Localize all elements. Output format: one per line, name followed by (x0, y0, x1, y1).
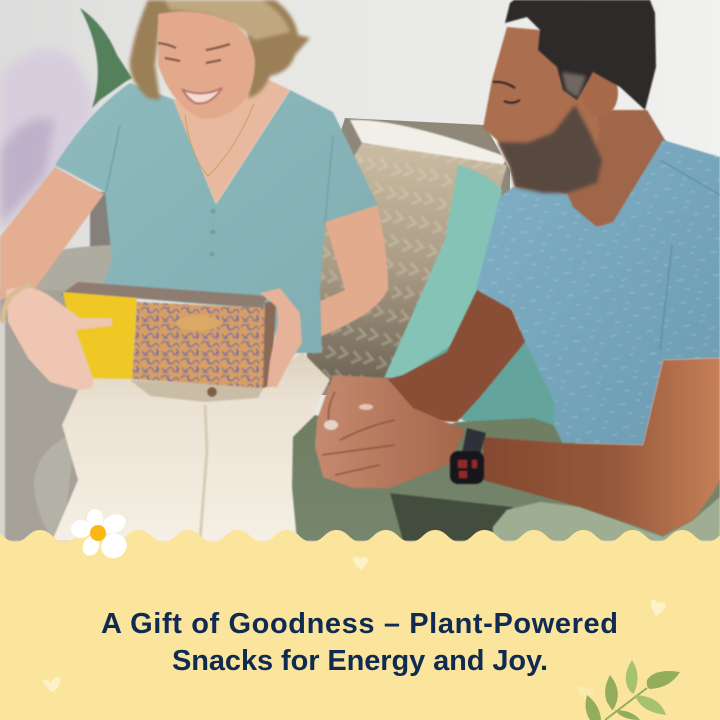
plant: pampas grass (0, 48, 92, 235)
woman: face (158, 12, 255, 119)
woman (0, 0, 388, 541)
headline: Snacks for Energy and Joy. (172, 645, 548, 677)
man: hair (505, 0, 656, 110)
icon: heart faint (578, 686, 594, 699)
icon: daisy flower (71, 509, 131, 563)
headline: A Gift of Goodness – Plant-Powered (101, 608, 618, 640)
man: hands (315, 375, 465, 488)
man: shirt (476, 140, 720, 445)
man: eye and brow (493, 82, 520, 103)
woman: hands (3, 284, 302, 390)
man: grey sideburn (562, 72, 586, 98)
woman: smile (183, 88, 222, 103)
man: upper arm (385, 290, 525, 422)
man: smartwatch (450, 428, 486, 484)
man: ear (582, 69, 618, 117)
box: end flap (263, 300, 276, 388)
man: head (483, 0, 656, 193)
man: trousers (292, 415, 720, 541)
woman: shirt (55, 83, 378, 353)
pillow: teal (384, 165, 575, 445)
gift box (60, 282, 276, 388)
bracelet (3, 284, 32, 323)
woman: trousers (52, 352, 330, 541)
wall background (0, 0, 720, 545)
woman: right arm (296, 200, 388, 344)
icon: heart top centre (353, 556, 368, 570)
plant: green fern leaf (80, 8, 132, 108)
hand: left (6, 287, 112, 390)
woman: neck and chest (173, 78, 290, 204)
man: forearm lower (483, 358, 720, 535)
woman: eyes and brows (158, 43, 230, 63)
woman: left arm (0, 167, 104, 300)
pillow: white (350, 120, 507, 172)
man: neck (560, 110, 668, 228)
woman: necklace (185, 104, 254, 176)
sofa: back right (310, 118, 510, 395)
woman: hair (130, 0, 310, 100)
hand: right (260, 288, 302, 387)
pillow: patterned beige (305, 143, 507, 385)
box: yellow sleeve (63, 292, 137, 379)
icon: green leaf sprig (586, 660, 680, 720)
man (292, 0, 720, 541)
man: beard (498, 105, 602, 193)
icon: heart right (651, 599, 666, 616)
banner: scalloped yellow panel (0, 530, 720, 720)
fingernails (324, 420, 338, 430)
photo: couple opening a gift box on a sofa (0, 0, 720, 545)
sofa: left arm and seat (0, 192, 125, 541)
icon: heart left (43, 677, 61, 692)
box: logo (176, 315, 220, 331)
shirt: button placket (206, 208, 219, 270)
box: top face (60, 282, 267, 308)
box: patterned kraft front (132, 302, 267, 388)
